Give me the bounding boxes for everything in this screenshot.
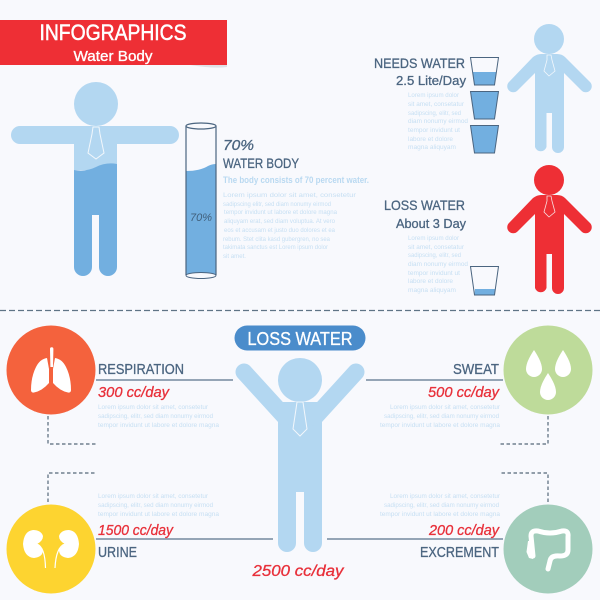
figure: body 70 percent water: [11, 82, 179, 276]
text block: loss water: [384, 197, 468, 294]
connector lines: [48, 380, 548, 539]
figure: needs water person: [507, 24, 592, 153]
text block: 70% water body: sit amet.: [223, 253, 246, 260]
panel: sweat: [380, 326, 592, 429]
panel: sweat: Lorem ipsum dolor sit amet, consetetur: [390, 404, 501, 411]
text block: 70% water body: aliquyam erat, sed diam voluptua. At vero: [224, 218, 335, 225]
figure: central loss water person: [244, 358, 356, 552]
water tube 70 percent: 70%: [190, 212, 212, 224]
text block: 70% water body: Lorem ipsum dolor sit amet, consetetur: [223, 192, 357, 199]
panel: excrement: Lorem ipsum dolor sit amet, consetetur: [390, 493, 501, 500]
text block: loss water: About 3 Day: [396, 216, 466, 231]
title banner: [0, 20, 227, 68]
panel: respiration: Lorem ipsum dolor sit amet, consetetur: [98, 404, 209, 411]
text block: 70% water body: The body consists of 70 percent water.: [223, 175, 369, 186]
cups: needs water: [470, 58, 498, 153]
text block: loss water: Lorem ipsum dolor: [408, 235, 460, 242]
text block: 70% water body: 70%: [223, 137, 254, 154]
text block: needs water: diam nonumy eirmod: [408, 118, 468, 125]
cup: loss water: [470, 266, 498, 295]
panel: excrement: tempor invidunt ut labore et dolore magna: [380, 511, 500, 518]
text block: needs water: labore et dolore: [408, 136, 453, 143]
text block: loss water: sadipscing, elitr, sed: [408, 252, 461, 259]
text block: 70% water body: rebum. Stet clita kasd gubergren, no sea: [223, 236, 330, 243]
text block: 70% water body: tempor invidunt ut labore et dolore magna: [224, 209, 337, 216]
panel: excrement: 200 cc/day: [428, 522, 500, 539]
text block: needs water: tempor invidunt ut: [408, 127, 460, 134]
text block: 70% water body: eos et accusam et justo duo dolores et ea: [224, 227, 335, 234]
panel: respiration: tempor invidunt ut labore et dolore magna: [98, 422, 219, 429]
icon: intestines: [504, 504, 592, 594]
panel: respiration: [6, 326, 219, 429]
text block: 70% water body: sadipscing elitr, sed diam nonumy eirmod: [223, 201, 331, 208]
panel: excrement: EXCREMENT: [420, 544, 499, 561]
icon: water drops: [504, 326, 592, 414]
text block: loss water: labore et dolore: [408, 278, 453, 285]
panel: urine: 1500 cc/day: [98, 522, 174, 539]
title banner: Water Body: [74, 48, 153, 65]
text block: loss water: tempor invidunt ut: [408, 270, 460, 277]
panel: urine: [6, 493, 219, 594]
panel: sweat: SWEAT: [453, 361, 499, 378]
text block: loss water: magna aliquyam: [408, 287, 456, 294]
text block: needs water: NEEDS WATER: [374, 55, 465, 71]
panel: sweat: sadipscing, elitr, sed diam nonumy eirmod: [384, 413, 499, 420]
total amount: 2500 cc/day: [251, 563, 345, 580]
figure: loss water person: [507, 165, 592, 294]
text block: loss water: sit amet, consetatur: [408, 244, 465, 251]
text block: needs water: [374, 55, 468, 151]
panel: respiration: RESPIRATION: [98, 361, 184, 378]
text block: 70% water body: WATER BODY: [223, 155, 300, 171]
text block: loss water: diam nonumy eirmod: [408, 261, 468, 268]
water tube 70 percent: [186, 123, 216, 278]
panel: excrement: sadipscing, elitr, sed diam nonumy eirmod: [384, 502, 499, 509]
heading pill: loss water: LOSS WATER: [248, 329, 353, 349]
panel: excrement: [380, 493, 592, 594]
panel: sweat: 500 cc/day: [428, 384, 500, 401]
text block: 70% water body: takimata sanctus est Lorem ipsum dolor: [223, 244, 329, 251]
text block: loss water: LOSS WATER: [384, 197, 465, 213]
icon: kidneys: [6, 504, 96, 594]
text block: needs water: sadipscing, elitr, sed: [408, 110, 461, 117]
text block: needs water: magna aliquyam: [408, 144, 456, 151]
panel: sweat: tempor invidunt ut labore et dolore magna: [380, 422, 500, 429]
text block: needs water: sit amet, consetatur: [408, 101, 465, 108]
text block: needs water: 2.5 Lite/Day: [396, 73, 467, 88]
panel: urine: URINE: [98, 544, 137, 561]
text block: 70% water body: [223, 137, 369, 260]
panel: urine: tempor invidunt ut labore et dolore magna: [98, 511, 219, 518]
panel: urine: Lorem ipsum dolor sit amet, consetetur: [98, 493, 209, 500]
panel: respiration: sadipscing, elitr, sed diam nonumy eirmod: [98, 413, 213, 420]
panel: urine: sadipscing, elitr, sed diam nonumy eirmod: [98, 502, 213, 509]
title banner: INFOGRAPHICS: [40, 20, 186, 45]
text block: needs water: Lorem ipsum dolor: [408, 92, 460, 99]
panel: respiration: 300 cc/day: [98, 384, 170, 401]
icon: lungs: [6, 326, 96, 414]
